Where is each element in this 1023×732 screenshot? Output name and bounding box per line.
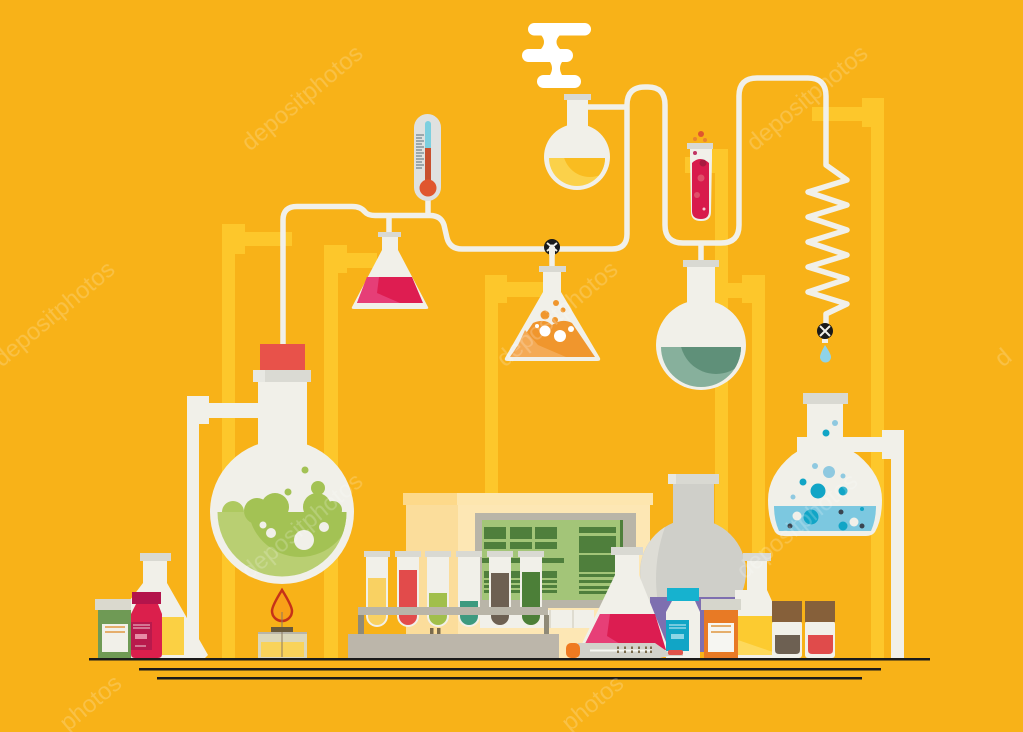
grey round flask [640,474,746,652]
tube: brown [487,551,513,627]
drawer panel [430,610,594,634]
tube: red [395,551,421,627]
large green round flask [210,344,354,584]
watermarks: d [990,343,1017,373]
smoke [522,23,591,88]
watermarks: depositphotos [492,256,623,373]
tube: dark green [518,551,544,627]
valve: orange flask [544,239,560,255]
right stand [882,430,904,658]
yellow round flask top [544,94,617,190]
red conical flask front [578,547,670,657]
tube: teal [456,551,482,627]
monitor screen [475,513,636,608]
watermarks: depositphotos [742,40,873,157]
brown jars [772,601,835,658]
green jar [95,599,131,658]
left stand front pillar [187,420,199,658]
cabinet with monitor [403,493,653,658]
left stand [187,396,259,658]
burner and flame [258,590,307,658]
red bottle [131,592,162,658]
rack bar [358,607,548,615]
orange jar [701,599,741,658]
glass thermometer front [566,643,683,658]
red conical flask top [352,232,428,309]
background stands [222,98,884,658]
jar: brown [772,601,802,658]
tube: green [425,551,451,627]
blue flask [768,393,887,536]
tube: yellow [364,551,390,627]
test tubes [364,551,544,627]
watermarks: depositphotos [237,468,368,585]
jar: red [805,601,835,658]
thermometer [414,114,441,201]
small conical flask right [735,553,785,658]
coil valve and drop [817,323,833,363]
ground lines [89,658,930,680]
red test tube with bubbles [687,131,713,221]
green-teal round flask [656,260,752,390]
watermarks: depositphotos [732,468,863,585]
test tube rack back [348,615,559,658]
blue bottle [666,588,700,658]
pipework [283,78,847,345]
orange conical flask [505,266,600,361]
small conical flask left [130,553,208,658]
red stopper [260,344,305,370]
watermarks: depositphotos [237,40,368,157]
